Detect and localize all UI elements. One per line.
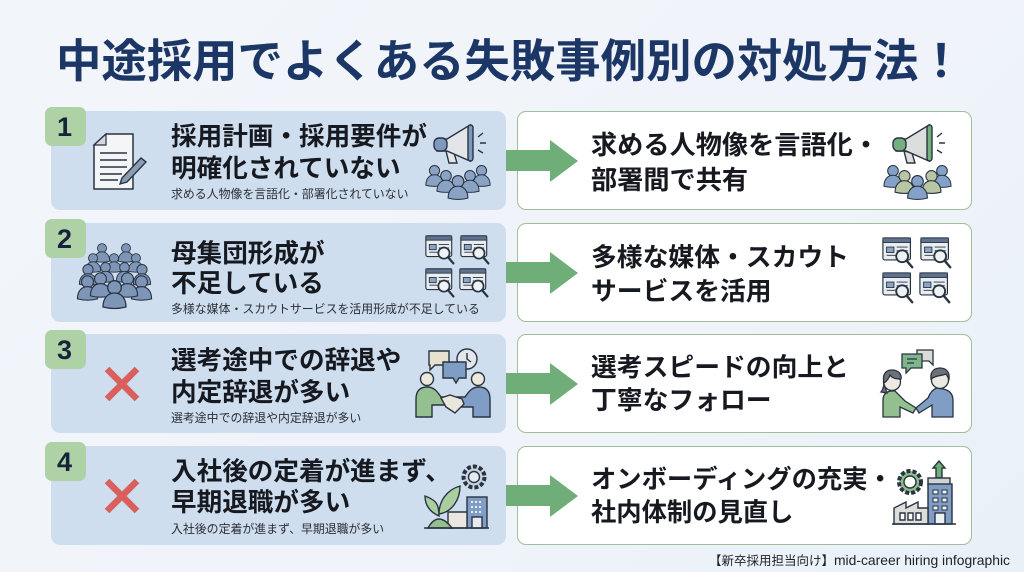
icon: megaphone and team — [883, 124, 952, 200]
badge: 4 — [45, 442, 86, 481]
icon: gear and office building — [892, 460, 956, 525]
heading: 明確化されていない — [171, 155, 401, 183]
badge: 1: 1 — [57, 112, 72, 142]
icon: search windows — [882, 237, 952, 304]
panel: problem 3 — [51, 334, 506, 433]
solution text — [591, 244, 849, 306]
heading — [171, 122, 427, 183]
footer caption: 【新卒採用担当向け】mid-career hiring infographic — [709, 552, 1010, 568]
heading: 採用計画・採用要件が — [171, 123, 427, 151]
solution text: サービスを活用 — [591, 278, 772, 306]
icon: megaphone and people — [425, 124, 491, 200]
badge: 2 — [45, 219, 86, 258]
arrow — [506, 475, 578, 517]
panel: problem 2 — [51, 223, 506, 322]
badge: 2: 2 — [57, 224, 72, 254]
solution text: 社内体制の見直し — [591, 499, 793, 527]
solution text: 多様な媒体・スカウト — [591, 244, 849, 272]
row 3 — [45, 330, 972, 433]
solution text — [591, 466, 893, 527]
icon: two people shaking hands — [880, 349, 954, 418]
subtext: 多様な媒体・スカウトサービスを活用形成が不足している — [171, 302, 480, 316]
arrow — [506, 140, 578, 182]
icon: red cross — [104, 366, 140, 402]
solution text: 求める人物像を言語化・ — [591, 130, 879, 160]
heading: 早期退職が多い — [171, 489, 350, 517]
solution text: 丁寧なフォロー — [591, 387, 772, 415]
row 2 — [45, 219, 972, 322]
badge: 3: 3 — [57, 335, 72, 365]
icon: plant, gear and building — [424, 464, 489, 529]
heading — [171, 458, 451, 517]
heading: 選考途中での辞退や — [171, 347, 401, 375]
panel: solution 2 — [517, 223, 972, 322]
heading — [171, 347, 401, 407]
badge: 3 — [45, 330, 86, 369]
row 1 — [45, 107, 972, 210]
icon: handshake and chat — [415, 348, 491, 418]
heading: 入社後の定着が進まず、 — [171, 458, 451, 486]
panel: solution 4 — [517, 446, 972, 545]
icon: crowd — [76, 243, 152, 310]
subtext: 入社後の定着が進まず、早期退職が多い — [171, 522, 384, 536]
subtext: 求める人物像を言語化・部署化されていない — [171, 187, 408, 201]
panel: solution 1 — [517, 111, 972, 210]
row 4 — [45, 442, 972, 545]
solution text — [591, 130, 879, 195]
solution text: 選考スピードの向上と — [591, 354, 849, 382]
title: 中途採用でよくある失敗事例別の対処方法！ — [56, 36, 964, 87]
heading: 内定辞退が多い — [171, 379, 350, 407]
arrow — [506, 252, 578, 294]
solution text — [591, 354, 849, 415]
icon: document and pencil — [92, 132, 147, 190]
solution text: オンボーディングの充実・ — [591, 466, 893, 494]
badge: 1 — [45, 107, 86, 146]
icon: search windows — [425, 235, 490, 298]
solution text: 部署間で共有 — [591, 165, 748, 195]
heading: 母集団形成が — [171, 240, 325, 268]
icon: red cross — [104, 478, 140, 514]
heading — [171, 240, 325, 298]
panel: problem 4 — [51, 446, 506, 545]
panel: solution 3 — [517, 334, 972, 433]
panel: problem 1 — [51, 111, 506, 210]
heading: 不足している — [171, 270, 324, 298]
subtext: 選考途中での辞退や内定辞退が多い — [171, 411, 361, 425]
arrow — [506, 363, 578, 405]
badge: 4: 4 — [57, 447, 72, 477]
